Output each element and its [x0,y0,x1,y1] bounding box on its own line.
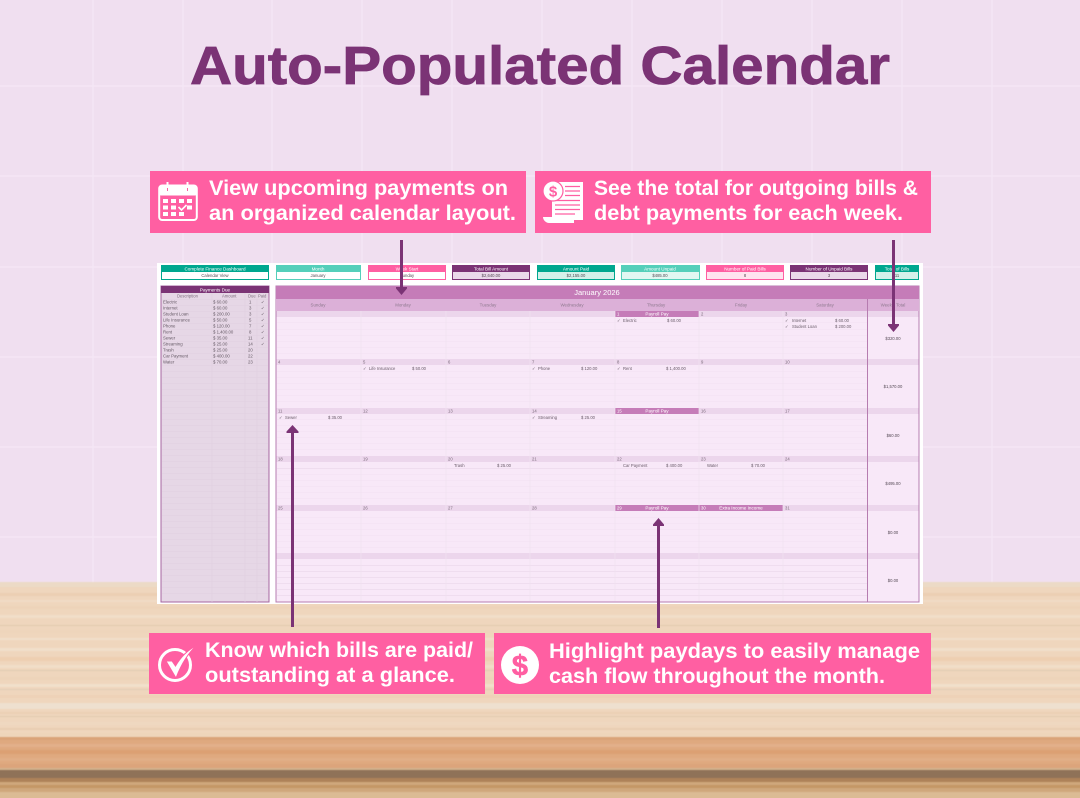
calendar bill entries: ✓ [532,366,536,371]
date numbers: 25 [278,506,283,510]
calendar bill entries: Sewer [285,415,297,420]
arrow: to weekly total [888,240,899,332]
KPI: total bills [875,265,919,280]
KPI: total bill amount: Total Bill Amount [474,266,509,272]
calendar bill entries: Life Insurance [369,366,396,371]
payments list: Student Loan [163,312,189,316]
payments list: $ 1,400.00 [213,330,234,334]
calendar bill entries: $ 200.00 [835,324,852,329]
payments list: ✓ [261,330,265,334]
weekday headers: Weekly Total [881,302,905,308]
callout: paydays: cash flow throughout the month. [549,665,885,688]
arrow: to paid check marks [286,425,298,627]
payments list: $ 120.00 [213,324,230,328]
icon: check mark [160,645,197,680]
callout: calendar layout: View upcoming payments on [209,177,508,200]
payments list: ✓ [261,300,265,304]
KPI: number of unpaid bills [790,265,868,280]
payments list: 20 [248,348,253,352]
weekday headers: Sunday [311,302,326,308]
payments list: $ 25.00 [213,348,228,352]
callout: paydays: Highlight paydays to easily manage [549,640,920,663]
weekly totals: $320.00 [885,336,901,341]
weekly totals: $0.00 [888,530,899,535]
date numbers: 14 [532,408,537,414]
callout: paid status: outstanding at a glance. [205,664,455,687]
weekday headers: Friday [735,302,748,308]
payments list: 23 [248,360,253,364]
date numbers: 4 [278,360,281,364]
date numbers: 20 [448,456,453,462]
payday labels: Extra Income Income [719,506,763,510]
payments list: ✓ [261,306,265,310]
date numbers: 11 [278,408,283,414]
date numbers: 6 [448,360,451,364]
date numbers: 3 [785,312,788,316]
calendar bill entries: $ 70.00 [751,463,766,468]
calendar bill entries: Trash [454,463,465,468]
KPI: amount unpaid [621,265,700,280]
KPI: month: Month [312,266,325,272]
date numbers: 17 [785,408,790,414]
calendar bill entries: ✓ [363,366,367,371]
payday labels: Payroll Pay [645,312,669,316]
KPI: number of paid bills: 8 [744,273,747,278]
date numbers: 12 [363,408,368,414]
payments list: $ 25.00 [213,342,228,346]
KPI: total bill amount [452,265,530,280]
payments list: ✓ [261,342,265,346]
payments list: Streaming [163,342,183,346]
payday highlights [615,311,783,511]
payments list: 5 [249,318,252,322]
payments list: 22 [248,354,253,358]
date numbers: 24 [785,456,790,462]
calendar bill entries: ✓ [532,415,536,420]
weekly totals: $1,570.00 [884,384,903,389]
calendar bill entries [279,318,852,468]
payments list: Phone [163,324,176,328]
weekday headers: Tuesday [480,302,497,308]
payments list: 3 [249,306,252,310]
arrow: to calendar layout [396,240,407,295]
payments list: ✓ [261,336,265,340]
date numbers: 26 [363,506,368,510]
callout: calendar layout: an organized calendar layout. [209,202,516,225]
panel: calendar [276,286,919,602]
date numbers: 7 [532,360,535,364]
payments column headers [177,294,267,298]
date numbers: 5 [363,360,366,364]
calendar bill entries: Streaming [538,415,558,420]
KPI: number of paid bills: Number of Paid Bills [724,266,767,272]
payday labels: Payroll Pay [645,408,669,414]
KPI: amount paid: Amount Paid [563,266,590,272]
payments list: 8 [249,330,252,334]
payments column headers: Paid [258,294,267,298]
payments list: 7 [249,324,252,328]
weekday headers: Saturday [816,302,835,308]
KPI: month: January [311,273,326,278]
payday labels: 15 [617,408,622,414]
payments list: Trash [163,348,174,352]
KPI: week start: Week Start [396,266,419,272]
icon: dollar [501,646,539,684]
callout: weekly totals [535,171,931,233]
payments list: $ 60.00 [213,300,228,304]
weekly totals: $60.00 [887,433,900,438]
payday labels: Payroll Pay [645,506,669,510]
payments list: Internet [163,306,178,310]
KPI: number of unpaid bills: 3 [828,273,831,278]
payday labels: 1 [617,312,620,316]
payments list: $ 70.00 [213,360,228,364]
KPI: amount paid: $2,155.00 [567,273,586,278]
calendar bill entries: ✓ [617,366,621,371]
calendar bill entries: Phone [538,366,551,371]
payday labels: 29 [617,506,622,510]
callout: weekly totals: See the total for outgoing bills & [594,177,918,200]
payments list: $ 35.00 [213,336,228,340]
KPI: total bill amount: $2,640.00 [482,273,501,278]
payments list: Rent [163,330,173,334]
date numbers: 27 [448,506,453,510]
KPI: amount unpaid: $485.00 [652,273,668,278]
weekday headers: Monday [395,302,412,308]
calendar bill entries: ✓ [785,324,789,329]
calendar bill entries: $ 1,400.00 [666,366,686,371]
calendar bill entries: $ 120.00 [581,366,598,371]
date bands [276,311,918,559]
KPI: number of paid bills [706,265,784,280]
callout: calendar layout [150,171,526,233]
calendar bill entries: Water [707,463,719,468]
date numbers: 9 [701,360,704,364]
icon: receipt [543,181,583,223]
KPI: total bills: Total of Bills [885,266,910,272]
calendar bill entries: Rent [623,366,633,371]
callout: paydays [494,633,931,694]
date numbers: 18 [278,456,283,462]
calendar bill entries: $ 60.00 [667,318,682,323]
payments list: $ 200.00 [213,312,230,316]
calendar bill entries: $ 50.00 [412,366,427,371]
calendar bill entries: $ 400.00 [666,463,683,468]
date numbers [278,312,790,510]
panel: payments to pay: Payments Due [200,287,231,292]
payments list: 3 [249,312,252,316]
payments list: ✓ [261,324,265,328]
spreadsheet screenshot [157,263,923,604]
callout: paid status [149,633,485,694]
calendar bill entries: $ 35.00 [328,415,343,420]
payments list: Electric [163,300,178,304]
KPI: dashboard title: Calendar View [201,273,230,278]
payday labels: 30 [701,506,706,510]
weekly totals: $495.00 [885,481,901,486]
date numbers: 21 [532,456,537,462]
calendar bill entries: Student Loan [792,324,818,329]
calendar bill entries: Car Payment [623,463,648,468]
payments column headers: Description [177,294,199,298]
calendar bill entries: Electric [623,318,637,323]
payments list [163,300,265,364]
panel: calendar: January 2026 [574,288,620,297]
weekly totals [884,336,903,583]
calendar bill entries: ✓ [785,318,789,323]
icon: dollar: $ [512,650,528,682]
date numbers: 2 [701,312,704,316]
payments list: Car Payment [163,354,189,358]
KPI: amount paid [537,265,615,280]
icon: calendar [159,182,197,220]
weekly totals: $0.00 [888,578,899,583]
date numbers: 8 [617,360,620,364]
KPI: total bills: 11 [895,273,900,278]
KPI: dashboard title [161,265,269,280]
payments list: 14 [248,342,253,346]
payments column headers: Amount [222,294,237,298]
calendar bill entries: ✓ [617,318,621,323]
date numbers: 19 [363,456,368,462]
calendar bill entries: $ 60.00 [835,318,850,323]
payments list: ✓ [261,318,265,322]
KPI: number of unpaid bills: Number of Unpaid Bills [806,266,853,272]
KPI: week start: Sunday [400,273,415,278]
date numbers: 31 [785,506,790,510]
date numbers: 10 [785,360,790,364]
date numbers: 22 [617,456,622,462]
date numbers: 23 [701,456,706,462]
calendar bill entries: ✓ [279,415,283,420]
weekday headers: Thursday [647,302,666,308]
arrow: to payday highlight [653,518,664,628]
KPI: month [276,265,361,280]
calendar bill entries: $ 25.00 [497,463,512,468]
KPI: dashboard title: Complete Finance Dashboard [184,266,246,272]
payments column headers: Due [248,294,256,298]
calendar bill entries: Internet [792,318,807,323]
KPI: amount unpaid: Amount Unpaid [644,266,676,272]
payments list: $ 400.00 [213,354,230,358]
payments list: $ 60.00 [213,306,228,310]
callout: weekly totals: debt payments for each week. [594,202,903,225]
title: Auto-Populated Calendar [190,36,890,96]
date numbers: 28 [532,506,537,510]
icon: receipt: $ [549,184,558,200]
panel: payments to pay [161,286,269,602]
weekday headers: Wednesday [560,302,584,308]
callout: paid status: Know which bills are paid/ [205,639,473,662]
payments list: 1 [249,300,252,304]
KPI: week start [368,265,446,280]
payday labels [617,312,763,510]
date numbers: 16 [701,408,706,414]
weekday headers [311,302,905,308]
wooden table [0,582,1080,798]
payments list: Water [163,360,175,364]
payments list: 11 [248,336,253,340]
payments list: ✓ [261,312,265,316]
payments list: $ 50.00 [213,318,228,322]
calendar bill entries: $ 25.00 [581,415,596,420]
date numbers: 13 [448,408,453,414]
payments list: Sewer [163,336,176,340]
payments list: Life Insurance [163,318,191,322]
